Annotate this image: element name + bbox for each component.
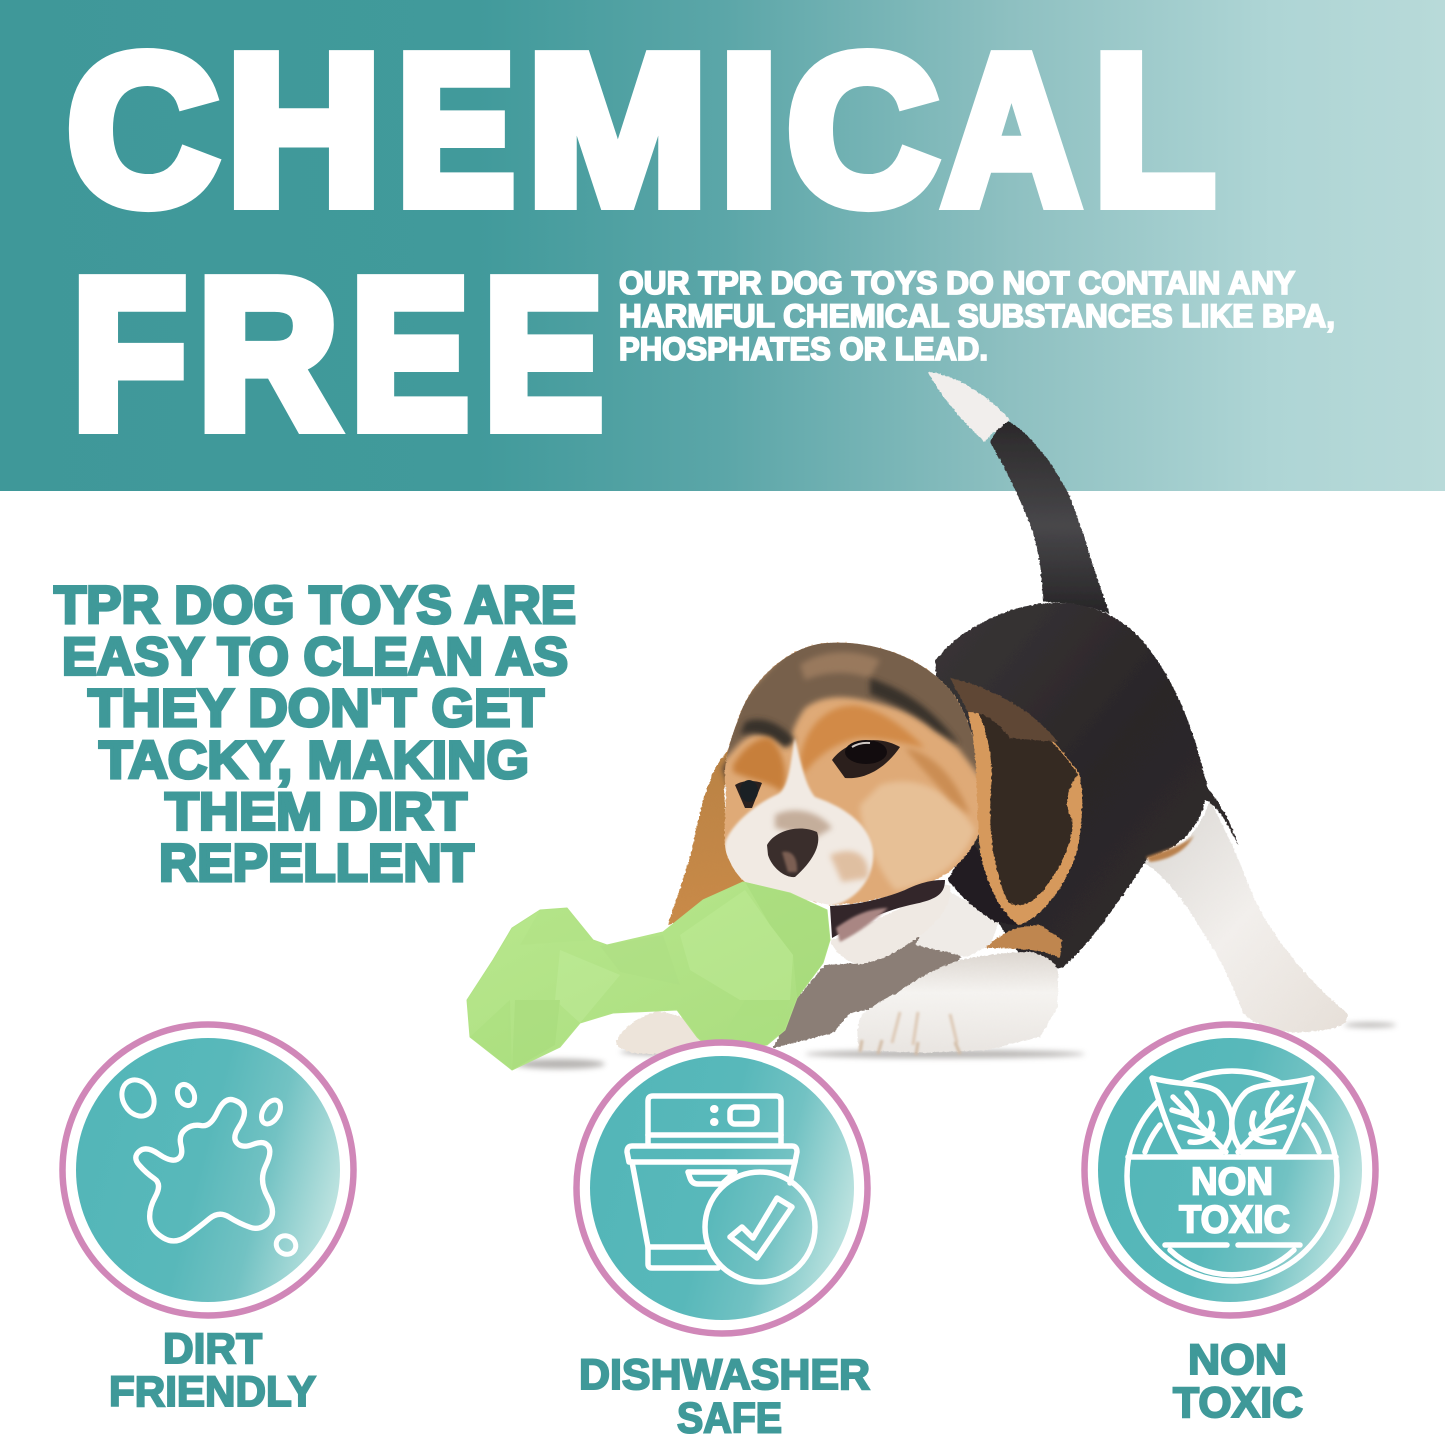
title: CHEMICAL FREE: C: [67, 11, 218, 248]
icon text: non toxic: TOXIC: [1179, 1198, 1290, 1242]
header description text: HARMFUL CHEMICAL SUBSTANCES LIKE BPA,: [619, 298, 1335, 334]
blaze and muzzle: [724, 738, 873, 907]
product: green TPR bone toy: [467, 882, 830, 1070]
badge ring: [62, 1024, 354, 1316]
title: CHEMICAL FREE: A: [943, 11, 1080, 248]
puppy right ear: [950, 678, 1082, 925]
puppy front leg: [857, 952, 1058, 1053]
crown: [726, 642, 977, 777]
brow tan: [800, 706, 925, 775]
badge disc: [76, 1038, 340, 1302]
puppy body: [935, 603, 1238, 970]
title: CHEMICAL FREE: R: [198, 235, 338, 472]
neck dark: [948, 845, 1018, 925]
seal bands: [1128, 1157, 1336, 1245]
teal heading: easy to clean: REPELLENT: [159, 834, 474, 893]
title: CHEMICAL FREE: E: [351, 235, 469, 472]
puppy left ear: [668, 745, 760, 925]
puppy chest and neck: [773, 845, 1062, 1048]
puppy nose: [767, 828, 818, 877]
right leaf: [1232, 1078, 1312, 1152]
teal heading: easy to clean: THEY DON'T GET: [88, 679, 544, 738]
puppy head: [715, 635, 990, 964]
label: dishwasher safe: DISHWASHER: [579, 1351, 870, 1399]
title: CHEMICAL FREE: [67, 11, 1215, 472]
badge: dirt friendly: [62, 1024, 354, 1316]
icon: dishwasher with check: [627, 1096, 815, 1282]
illustration: beagle puppy: [515, 372, 1396, 1069]
puppy right eye: [832, 740, 900, 778]
chest white: [915, 890, 1000, 957]
teal heading: easy to clean: TACKY, MAKING: [99, 731, 529, 790]
title: CHEMICAL FREE: L: [1094, 11, 1215, 248]
label: dirt friendly: FRIENDLY: [109, 1368, 316, 1416]
badge disc: [590, 1056, 854, 1320]
seal circle: [1127, 1071, 1337, 1281]
icon: dirt splash: [116, 1074, 299, 1258]
label: non toxic: [1173, 1336, 1303, 1427]
teal heading: easy to clean: EASY TO CLEAN AS: [62, 628, 568, 686]
left leaf: [1152, 1078, 1232, 1152]
puppy jaw: [830, 885, 950, 964]
label: dirt friendly: DIRT: [163, 1325, 262, 1373]
toy facets: [470, 882, 830, 1070]
puppy left eye: [735, 780, 762, 808]
mouth interior: [836, 908, 888, 942]
header banner background: [0, 0, 1445, 491]
title: CHEMICAL FREE: I: [720, 11, 778, 248]
label: dirt friendly: [109, 1325, 316, 1416]
puppy hip tan patch: [1146, 835, 1194, 862]
badge ring: [576, 1042, 868, 1334]
icon text: non toxic: [1179, 1160, 1290, 1242]
seal inner arcs: [1145, 1125, 1319, 1275]
badge: dishwasher safe: [576, 1042, 868, 1334]
header description text: OUR TPR DOG TOYS DO NOT CONTAIN ANY: [619, 265, 1295, 301]
title: CHEMICAL FREE: H: [227, 11, 381, 248]
teal heading: easy to clean: TPR DOG TOYS ARE: [54, 576, 576, 635]
label: dishwasher safe: SAFE: [677, 1394, 782, 1442]
badge disc: [1098, 1038, 1362, 1302]
title: CHEMICAL FREE: M: [528, 11, 708, 248]
teal heading: easy to clean: [54, 576, 576, 893]
header description text: [619, 265, 1335, 367]
puppy tail: [928, 372, 1110, 614]
puppy front paw toes: [860, 1012, 960, 1055]
badge: non toxic: [1084, 1024, 1376, 1316]
ground shadows: [515, 1022, 1396, 1069]
header description text: PHOSPHATES OR LEAD.: [619, 331, 988, 367]
neck grey: [773, 930, 962, 1048]
cheek: [860, 781, 975, 890]
teal heading: easy to clean: THEM DIRT: [165, 782, 467, 842]
puppy hind leg: [1143, 800, 1347, 1032]
head base: [724, 643, 981, 905]
title: CHEMICAL FREE: F: [72, 235, 186, 472]
puppy mouth: [830, 880, 945, 938]
title: CHEMICAL FREE: C: [787, 11, 938, 248]
chest tan patch: [985, 925, 1062, 958]
label: non toxic: NON: [1188, 1336, 1287, 1384]
badge ring: [1084, 1024, 1376, 1316]
icon text: non toxic: NON: [1191, 1160, 1273, 1204]
head markings: [724, 642, 977, 905]
puppy left paw: [616, 1011, 722, 1054]
label: non toxic: TOXIC: [1173, 1379, 1303, 1427]
title: CHEMICAL FREE: E: [397, 11, 515, 248]
icon: non toxic seal with leaves: [1127, 1071, 1337, 1281]
title: CHEMICAL FREE: E: [484, 235, 603, 472]
label: dishwasher safe: [579, 1351, 870, 1442]
